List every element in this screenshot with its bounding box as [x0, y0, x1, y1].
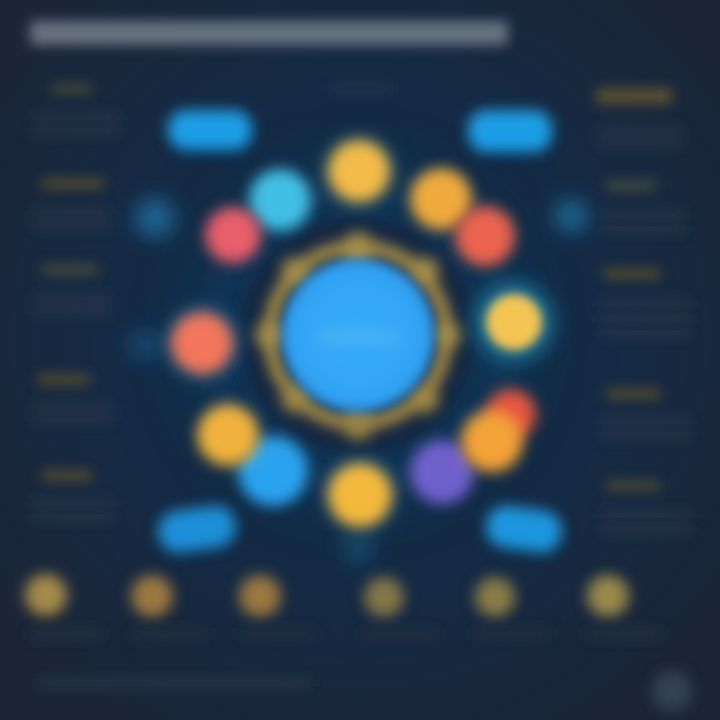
node: left coral: [164, 305, 240, 381]
left item 2: [32, 178, 112, 230]
node: red lower right: [486, 389, 536, 439]
left column: text blocks: [32, 84, 120, 522]
left item 5: [32, 470, 114, 522]
node: red upper left: [205, 207, 261, 263]
subtitle above diagram: [330, 84, 392, 93]
pill: bottom right: [483, 503, 565, 555]
left item 1: [32, 84, 120, 136]
pill: top right: [468, 110, 552, 152]
node: orange lower right: [461, 410, 523, 472]
right item 2: [600, 180, 686, 234]
node: purple lower right: [410, 440, 474, 504]
node: right yellow: [474, 282, 554, 362]
node: upper right dim: [554, 199, 588, 233]
small dim blue nodes: [129, 198, 588, 564]
hub label: [318, 330, 398, 344]
gear ring around hub: [255, 232, 461, 440]
node: orange upper right: [410, 168, 472, 230]
bottom item 3: [239, 575, 316, 640]
right column: text blocks: [596, 88, 690, 534]
node: yellow lower left: [197, 404, 259, 466]
node: cyan upper left: [249, 169, 311, 231]
node: upper left dim: [135, 198, 175, 238]
bottom row of icons and captions: [25, 574, 662, 640]
pill: top left: [168, 110, 252, 150]
central hub circle: [281, 258, 435, 412]
bottom item 5: [474, 577, 550, 640]
right item 4: [600, 388, 690, 440]
left item 3: [32, 264, 112, 316]
central glow: [193, 170, 523, 500]
node: left dim: [129, 329, 161, 361]
footer logo: [652, 671, 692, 711]
left item 4: [32, 374, 114, 424]
bottom item 6: [586, 575, 662, 640]
node: red upper right: [455, 206, 515, 266]
right item 1: [596, 88, 682, 148]
node: bottom yellow: [322, 457, 398, 533]
right item 5: [600, 480, 690, 534]
blue pills: [155, 110, 565, 555]
right item 3: [600, 268, 690, 338]
orbit nodes: [164, 133, 554, 533]
bottom item 2: [131, 575, 208, 640]
node: blue lower left: [238, 436, 308, 506]
pill: bottom left: [155, 503, 239, 555]
node: top yellow: [321, 133, 397, 209]
title bar: [30, 21, 508, 45]
bottom item 1: [25, 574, 102, 640]
node: bottom dim: [342, 532, 374, 564]
bottom item 4: [362, 577, 438, 640]
footer text: [40, 678, 310, 688]
dark ring around hub: [240, 217, 476, 453]
